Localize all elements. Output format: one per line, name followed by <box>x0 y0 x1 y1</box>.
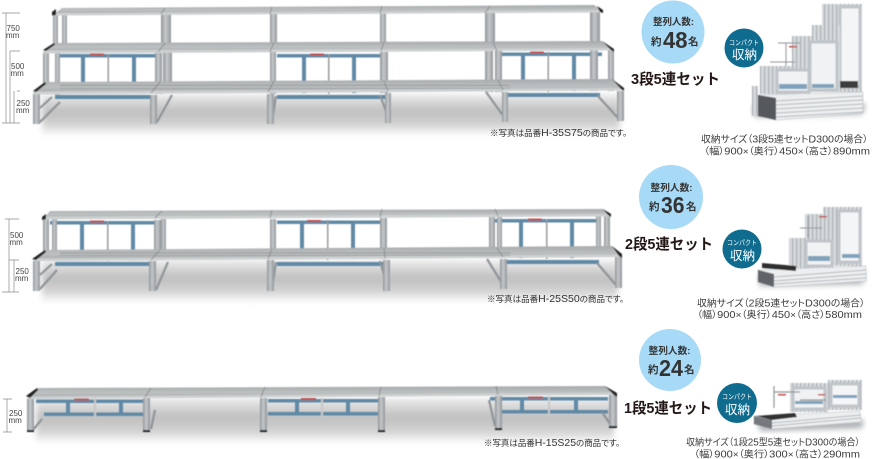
dimension scale: 750 / 500 / 250 mm: mm <box>6 31 20 40</box>
capacity circle: 24 <box>639 329 701 391</box>
capacity circle: 48: 名 <box>688 35 698 48</box>
capacity circle: 24: 24 <box>659 355 683 381</box>
panel: 2-tier set <box>2 165 866 321</box>
legs and struts <box>33 257 622 291</box>
badge: compact storage: 収納 <box>732 47 757 62</box>
dimension scale: 250 mm: mm <box>8 416 22 425</box>
dimension scale: 250 mm: 250 <box>9 409 23 418</box>
capacity circle: 24: 整列人数: <box>648 345 690 357</box>
storage image: folded 3-tier <box>752 4 866 120</box>
panel: 3-tier set <box>2 0 870 158</box>
dimension scale: 500 / 250 mm <box>2 219 29 292</box>
dimension scale: 500 / 250 mm: mm <box>10 238 23 247</box>
storage size caption: 収納サイズ（3段5連セットD300の場合） <box>701 134 868 146</box>
dimension scale: 250 mm <box>3 399 23 432</box>
capacity circle: 48: 整列人数: <box>653 16 694 28</box>
dimension scale: 750 / 500 / 250 mm: 500 <box>11 62 25 71</box>
dimension scale: 500 / 250 mm: 500 <box>10 231 24 240</box>
lower bracing <box>55 260 599 266</box>
floor shadow <box>42 94 620 136</box>
storage size caption: （幅）900×（奥行）450×（高さ）580mm <box>697 309 862 321</box>
storage image: folded 2-tier <box>758 207 866 287</box>
capacity circle: 36: 36 <box>661 192 684 218</box>
capacity circle: 36 <box>639 165 703 229</box>
badge: compact storage: 収納 <box>725 402 750 417</box>
storage size caption <box>701 134 870 158</box>
badge: compact storage: コンパクト <box>727 239 757 247</box>
dimension scale: 750 / 500 / 250 mm: 250 <box>16 99 30 108</box>
top deck <box>52 5 603 16</box>
upper deck <box>42 209 611 220</box>
legs and struts <box>27 395 617 432</box>
capacity circle: 48 <box>642 0 704 64</box>
floor shadow <box>36 398 614 444</box>
badge: compact storage: 収納 <box>730 248 755 263</box>
3-tier aluminium platform <box>33 5 624 124</box>
1-tier aluminium platform <box>26 386 617 432</box>
top-tier uprights <box>53 11 600 53</box>
set name: 3段5連セット <box>631 70 720 88</box>
badge: compact storage <box>724 28 764 68</box>
bracing <box>36 396 608 418</box>
dimension scale: 750 / 500 / 250 mm <box>2 13 30 123</box>
dimension scale: 750 / 500 / 250 mm: 750 <box>6 24 20 33</box>
upper bracing <box>50 218 600 261</box>
badge: compact storage: コンパクト <box>729 39 759 47</box>
upper bracing <box>55 52 602 94</box>
storage size caption <box>697 298 865 321</box>
storage size caption: 収納サイズ（1段25型5連セットD300の場合） <box>686 436 860 448</box>
dimension scale: 500 / 250 mm: mm <box>15 274 29 283</box>
2-tier aluminium platform <box>32 209 622 291</box>
capacity circle: 48: 48 <box>663 27 688 53</box>
deck <box>26 386 617 399</box>
floor shadow <box>42 260 618 303</box>
upper uprights <box>43 216 610 260</box>
capacity circle: 48: 約 <box>651 35 662 48</box>
capacity circle: 24: 約 <box>648 363 658 376</box>
photo note: ※写真は品番H-15S25の商品です。 <box>484 437 620 449</box>
set name: 1段5連セット <box>624 399 712 417</box>
badge: compact storage <box>717 383 757 423</box>
capacity circle: 24: 名 <box>684 363 694 376</box>
middle-tier uprights <box>43 49 614 95</box>
lower bracing <box>55 93 600 99</box>
middle deck <box>43 41 614 54</box>
badge: compact storage: コンパクト <box>722 393 752 401</box>
storage size caption: 収納サイズ（2段5連セットD300の場合） <box>697 298 865 310</box>
bottom deck <box>33 79 624 94</box>
dimension scale: 750 / 500 / 250 mm: mm <box>16 106 30 115</box>
photo note: ※写真は品番H-25S50の商品です。 <box>487 293 624 305</box>
dimension scale: 500 / 250 mm: 250 <box>16 267 29 276</box>
storage image: folded 1-tier <box>754 380 864 431</box>
dimension scale: 750 / 500 / 250 mm: mm <box>10 69 24 78</box>
badge: compact storage <box>722 230 762 268</box>
photo note: ※写真は品番H-35S75の商品です。 <box>490 127 627 139</box>
capacity circle: 36: 整列人数: <box>650 182 692 194</box>
lower deck <box>32 246 622 261</box>
capacity circle: 36: 約 <box>649 200 660 213</box>
set name: 2段5連セット <box>625 235 713 253</box>
panel: 1-tier set <box>3 329 864 459</box>
bottom legs and struts <box>33 91 624 124</box>
storage size caption: （幅）900×（奥行）450×（高さ）890mm <box>704 146 870 158</box>
capacity circle: 36: 名 <box>686 200 696 213</box>
storage size caption <box>686 436 860 459</box>
